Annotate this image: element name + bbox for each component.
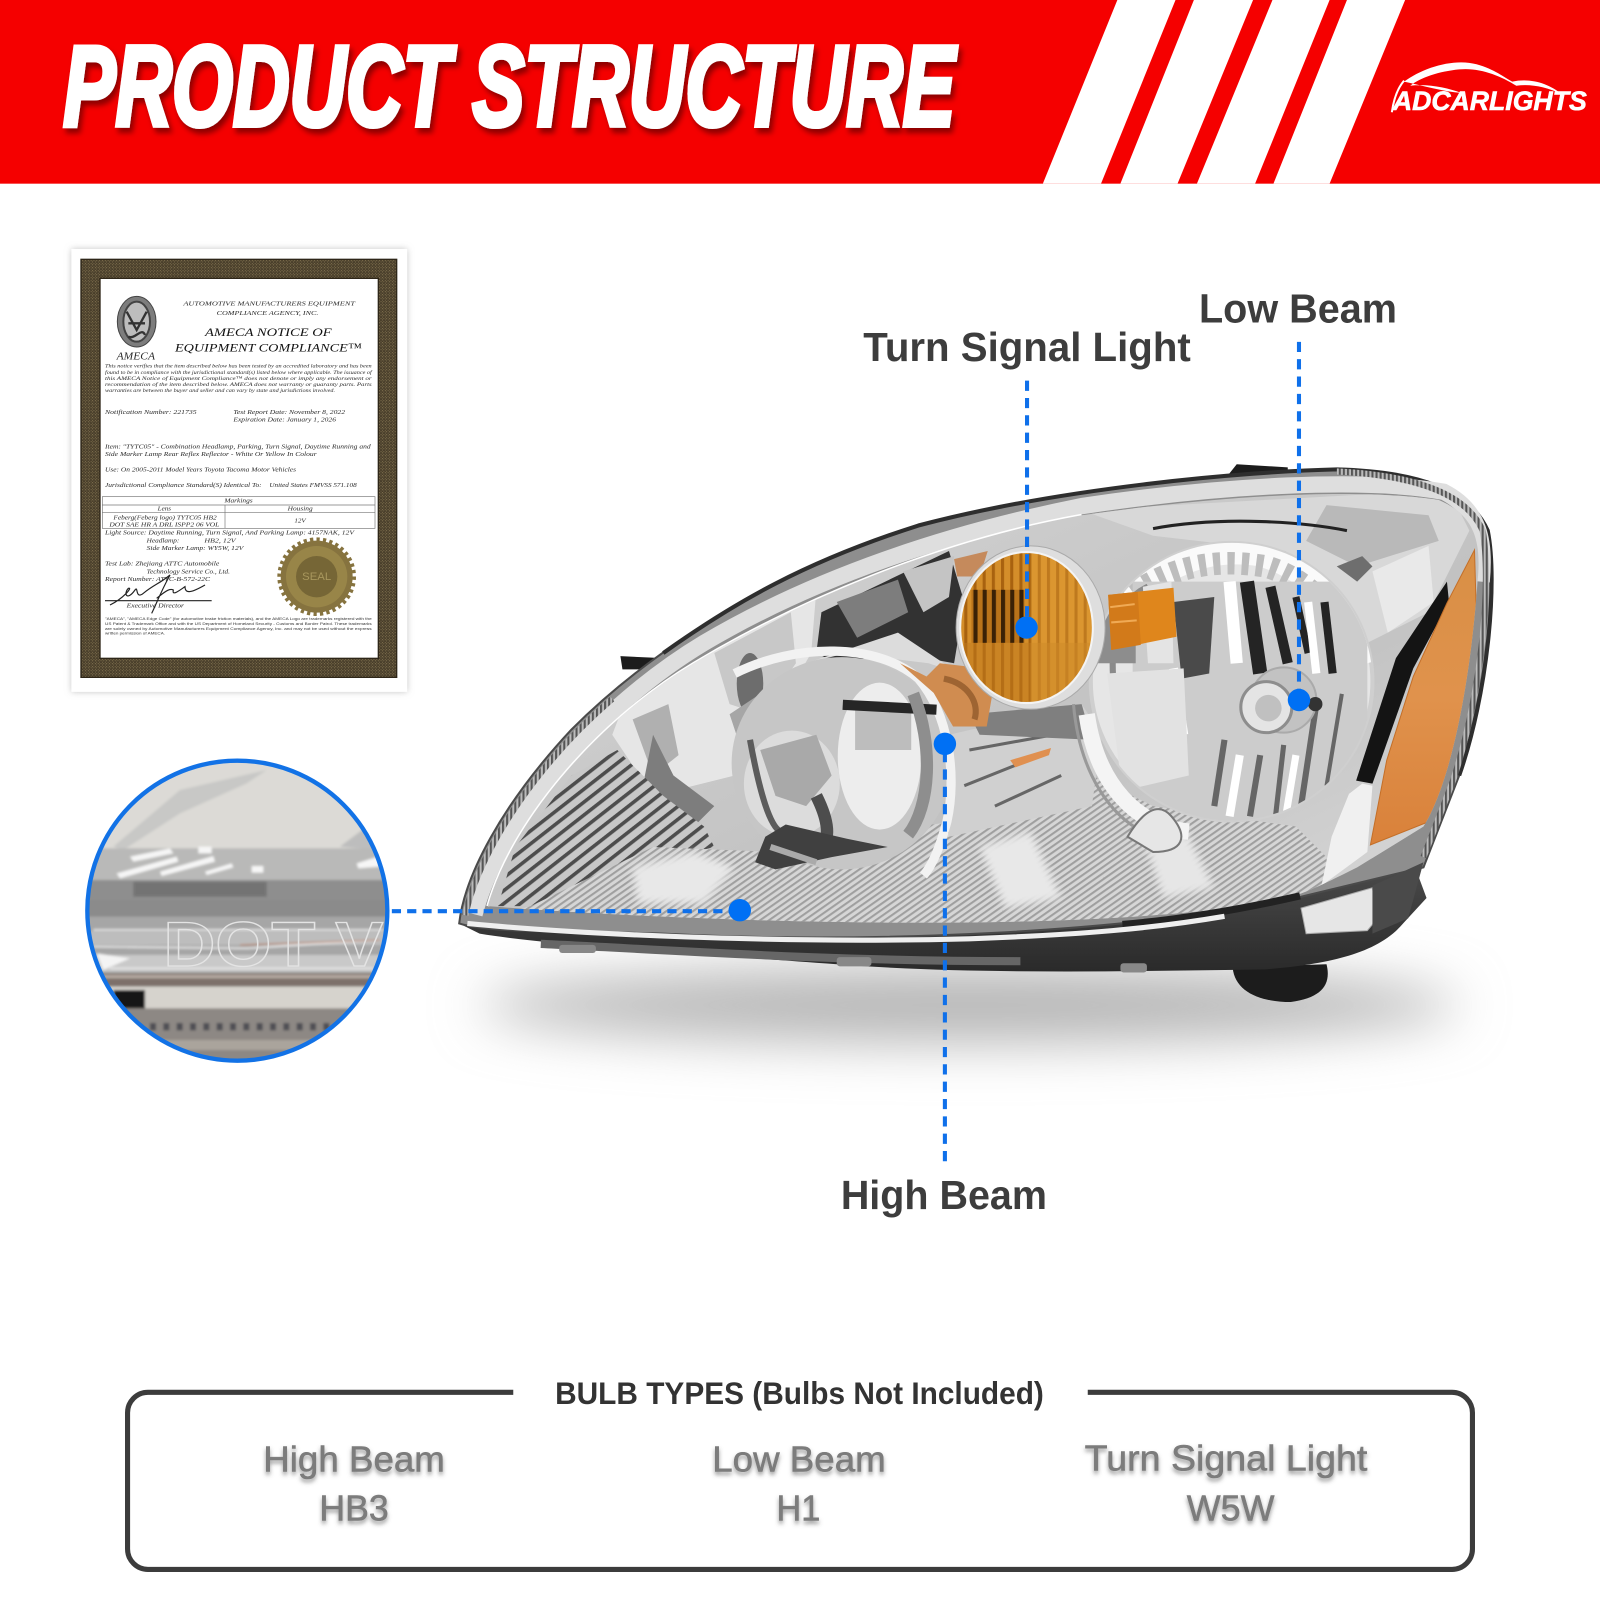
panel: bulb types [128,1375,1472,1569]
certificate header text [174,301,362,355]
amber block [1108,588,1177,650]
certificate body text: recommendation of the item described below. AMECA does not warranty or guaranty parts. Parts [105,381,372,388]
bulb types heading: BULB TYPES (Bulbs Not Included) [555,1375,1044,1411]
certificate fine print: "AMECA", "AMECA Edge Code" (for automotive brake friction materials), and the AMECA Logo are trademarks registered with the [105,617,372,621]
certificate header text: COMPLIANCE AGENCY, INC. [217,310,319,317]
dark reflector wedge [816,551,964,663]
callout: turn signal light: Turn Signal Light [863,324,1191,370]
dark housing [459,816,1427,971]
certificate body text: warranties are between the buyer and seller and can vary by state and jurisdictions involved. [105,388,335,394]
certificate body text: This notice verifies that the item described below has been tested by an accredited laboratory and has been [105,363,372,370]
brand logo: ADCARLIGHTS [1392,86,1587,116]
center chrome [949,704,1102,837]
mounting tabs [620,464,1328,1002]
low beam bulb: Low Beam [712,1439,886,1479]
diagonal white stripes [1043,0,1405,184]
certificate frame: Jurisdictional Compliance Standard(S) Identical To: [105,482,262,489]
header banner [0,0,1600,184]
certificate frame: Expiration Date: January 1, 2026 [232,417,337,424]
markings table: 12V [294,519,307,525]
high beam bulb: HB3 [319,1488,389,1528]
certificate header text: AMECA NOTICE OF [204,325,332,339]
callout: low beam [1199,285,1397,711]
lens outline [459,469,1492,937]
callout: turn signal light [863,324,1191,639]
amber housing pieces behind circle [900,663,992,727]
certificate body text: found to be in compliance with the jurisdictional standard(s) listed below where applicable. The issuance of [105,369,373,376]
markings table: Markings [223,499,253,505]
corporate seal [281,541,353,613]
callout: DOT marking leader [392,899,751,921]
amber turn signal lens [961,553,1092,702]
certificate frame: Technology Service Co., Ltd. [147,568,230,575]
left ribbed edge [465,699,612,915]
certificate frame: Light Source: Daytime Running, Turn Signal, And Parking Lamp: 4157NAK, 12V [104,530,355,537]
certificate frame: Executive Director [125,602,185,609]
certificate fine print: US Patent & Trademark Office and with the US Department of Homeland Security - Customs and Border Patrol. These trademarks [105,622,372,626]
certificate frame [81,259,397,677]
certificate frame: Test Report Date: November 8, 2022 [233,409,346,416]
low beam bulb [712,1439,886,1528]
low beam reflector [1073,543,1372,832]
markings table [102,497,375,529]
high beam projector [732,651,952,876]
headlight [459,459,1500,1042]
certificate fine print [105,617,372,636]
lower fine reflector [488,776,1327,931]
certificate body text: this AMECA Notice of Equipment Compliance™ does not denote or imply any endorsement or [105,375,373,382]
certificate frame: Report Number: ATTC-B-572-22C [104,576,211,583]
embossed DOT marking: DOT V [163,910,383,980]
certificate frame: Use: On 2005-2011 Model Years Toyota Tacoma Motor Vehicles [105,466,297,473]
certificate frame: Headlamp: [146,537,179,544]
DOT detail circle [80,750,400,1072]
markings table: Feberg(Feberg logo) TYTC05 HB2 [112,514,217,521]
lens lower edge highlight [467,916,1224,940]
turn signal bulb [1085,1438,1367,1528]
callout: high beam: High Beam [841,1172,1047,1218]
small clear bulb below [1128,809,1181,852]
clear rim band [474,484,1483,914]
high beam bulb: High Beam [263,1439,445,1479]
right ribbed edge [1337,471,1486,857]
callout: high beam [841,733,1047,1218]
brand logo [1392,62,1587,116]
bulb [1251,667,1316,733]
turn signal bulb: W5W [1187,1488,1275,1528]
certificate header text: EQUIPMENT COMPLIANCE™ [174,341,362,355]
amber side marker [1370,550,1477,845]
low beam bulb: H1 [777,1488,820,1528]
dark strip beside side marker [1356,582,1449,784]
certificate [71,249,407,692]
certificate fine print: written permission of AMECA. [105,632,165,636]
fan reflector [498,750,714,906]
high beam bulb [263,1439,445,1528]
upper right chrome [1092,494,1470,642]
housing clips [559,945,1147,972]
certificate frame: Notification Number: 221735 [104,409,197,416]
inner chrome housing [488,494,1478,923]
AMECA logo: AMECA [116,351,156,362]
markings table: DOT SAE HR A DRL ISPP2 06 VOL [108,523,220,529]
title: PRODUCT STRUCTURE [63,24,958,151]
callout: low beam: Low Beam [1199,285,1397,331]
signature [105,575,212,613]
markings table: Housing [286,507,313,513]
turn signal bulb: Turn Signal Light [1085,1438,1367,1478]
chrome below side marker [1372,826,1424,858]
side reflector lower clear [1301,888,1378,934]
corporate seal: SEAL [302,571,331,583]
ground shadow [480,968,1459,1042]
AMECA logo [116,296,156,362]
certificate frame: Side Marker Lamp Rear Reflex Reflector - White Or Yellow In Colour [105,451,317,458]
certificate body text [105,363,373,394]
markings table: Lens [156,507,172,513]
certificate fine print: are solely owned by Automotive Manufacturers Equipment Compliance Agency, Inc. and may not be used without the express [105,627,372,631]
certificate header text: AUTOMOTIVE MANUFACTURERS EQUIPMENT [182,301,357,308]
chrome ring around amber lens [956,546,1105,709]
left chrome panel [612,590,816,796]
certificate frame: Test Lab: Zhejiang ATTC Automobile [105,560,220,567]
certificate frame: United States FMVSS 571.108 [269,482,358,489]
dark upper rim [663,469,1492,776]
lower dark strip across lens [1122,896,1300,924]
certificate frame: Item: "TYTC05" - Combination Headlamp, Parking, Turn Signal, Daytime Running and [104,443,372,450]
certificate frame: HB2, 12V [203,537,237,544]
certificate frame: Side Marker Lamp: WY5W, 12V [147,545,245,552]
